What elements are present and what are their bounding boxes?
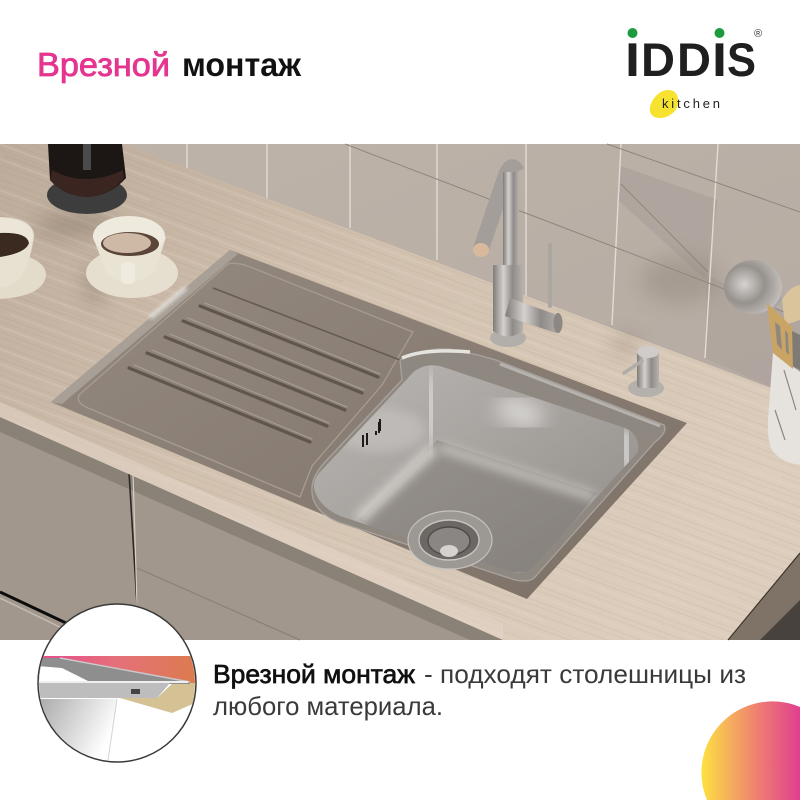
sink deck: [51, 250, 687, 599]
logo wordmark: S: [727, 33, 756, 86]
logo wordmark: I: [712, 33, 727, 86]
logo green dots: [628, 28, 724, 38]
logo wordmark: D: [677, 33, 711, 86]
caption text: [213, 659, 746, 721]
title: [37, 46, 302, 83]
worktop: [0, 144, 800, 640]
drainer raised edge: [213, 288, 400, 360]
caption text: Врезной монтаж: [213, 659, 416, 689]
worktop edge line: [728, 553, 800, 640]
kitchen photo illustration: [0, 144, 800, 640]
logo sub-brand: kitchen: [662, 96, 720, 111]
registered mark: ®: [754, 28, 762, 40]
cabinets: [0, 400, 800, 640]
worktop section: [38, 656, 196, 684]
shadows on worktop: [35, 213, 639, 353]
french press: [47, 144, 127, 214]
appliance at right edge: [728, 553, 800, 640]
inset: cut-in mounting detail: [38, 604, 196, 762]
decorative gradient corner: [701, 701, 800, 800]
cup and saucer: left: [0, 217, 46, 299]
logo wordmark: [625, 33, 756, 86]
caption text: - подходят столешницы из: [424, 659, 746, 689]
bowl basin: [314, 365, 638, 573]
ladle: [724, 260, 782, 315]
sink: [51, 250, 687, 599]
cup and saucer: centre: [86, 216, 178, 298]
bowl rim: [312, 349, 665, 581]
caption text: любого материала.: [213, 691, 443, 721]
logo: IDDIS kitchen: [625, 28, 762, 118]
utensil jar: [767, 285, 800, 465]
soap dispenser: [624, 346, 664, 397]
icon: yellow blob: [650, 90, 678, 118]
logo wordmark: I: [625, 33, 640, 86]
wall tiles: [100, 144, 800, 434]
title: монтаж: [182, 46, 302, 83]
logo wordmark: D: [641, 33, 675, 86]
bowl overflow slots: [363, 419, 380, 447]
sink edge: [38, 658, 190, 684]
title: Врезной: [37, 46, 170, 83]
drainer ribs: [129, 303, 380, 442]
drain: [408, 511, 492, 569]
faucet: [473, 167, 562, 347]
